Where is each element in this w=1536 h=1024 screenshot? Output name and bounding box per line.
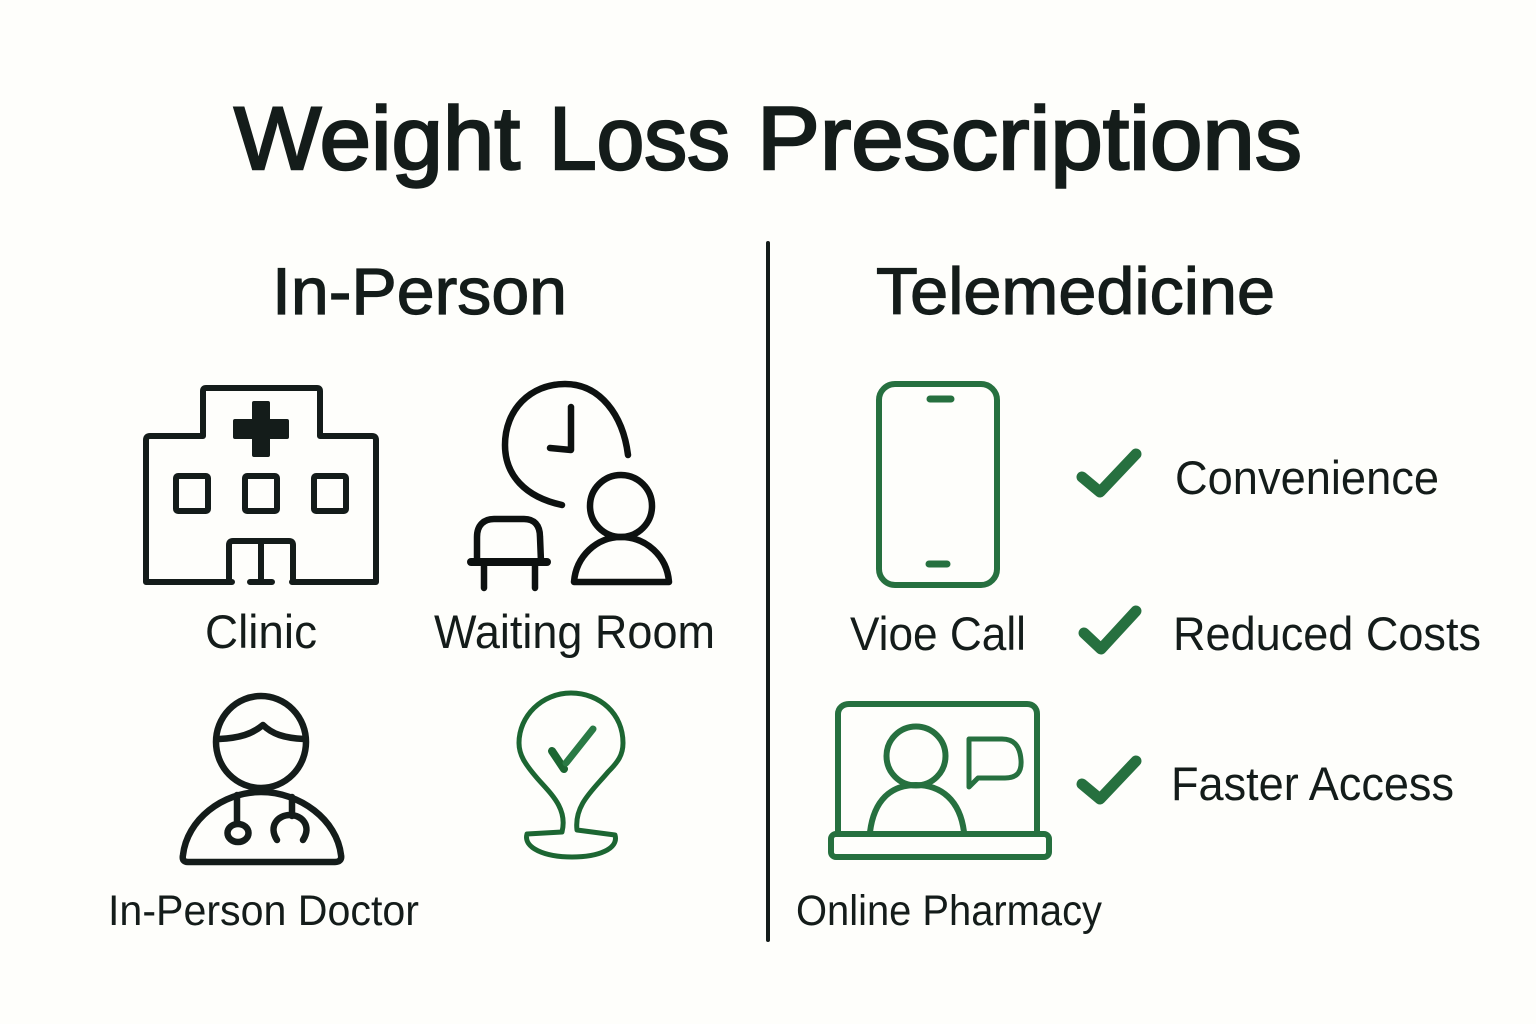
- heading: In-Person: In-Person: [272, 254, 567, 328]
- icon: waiting room: [471, 384, 669, 588]
- benefit: Faster Access: Faster Access: [1171, 757, 1454, 810]
- center divider: [766, 243, 770, 940]
- benefit: Reduced Costs: Reduced Costs: [1173, 607, 1481, 660]
- icon: clinic: [146, 388, 376, 582]
- title: Weight: [234, 88, 520, 188]
- check: Reduced Costs: [1084, 611, 1136, 649]
- label: Clinic: Clinic: [205, 605, 317, 658]
- icon: in-person doctor: [183, 696, 341, 862]
- label: In-Person Doctor: In-Person Doctor: [108, 887, 419, 935]
- icon: green pin with check: [519, 693, 623, 857]
- heading: Telemedicine: Telemedicine: [876, 254, 1275, 328]
- icon: phone: [879, 384, 997, 585]
- label: Waiting Room: Waiting Room: [434, 605, 715, 658]
- title: [234, 88, 1302, 188]
- label: Vioe Call: Vioe Call: [850, 607, 1026, 660]
- title: Loss: [549, 88, 730, 188]
- title: Prescriptions: [757, 88, 1302, 188]
- benefit: Convenience: Convenience: [1175, 451, 1439, 504]
- label: Online Pharmacy: Online Pharmacy: [796, 887, 1102, 935]
- check: Convenience: [1082, 454, 1136, 492]
- check: Faster Access: [1082, 761, 1136, 799]
- icon: laptop video consultation: [831, 704, 1049, 857]
